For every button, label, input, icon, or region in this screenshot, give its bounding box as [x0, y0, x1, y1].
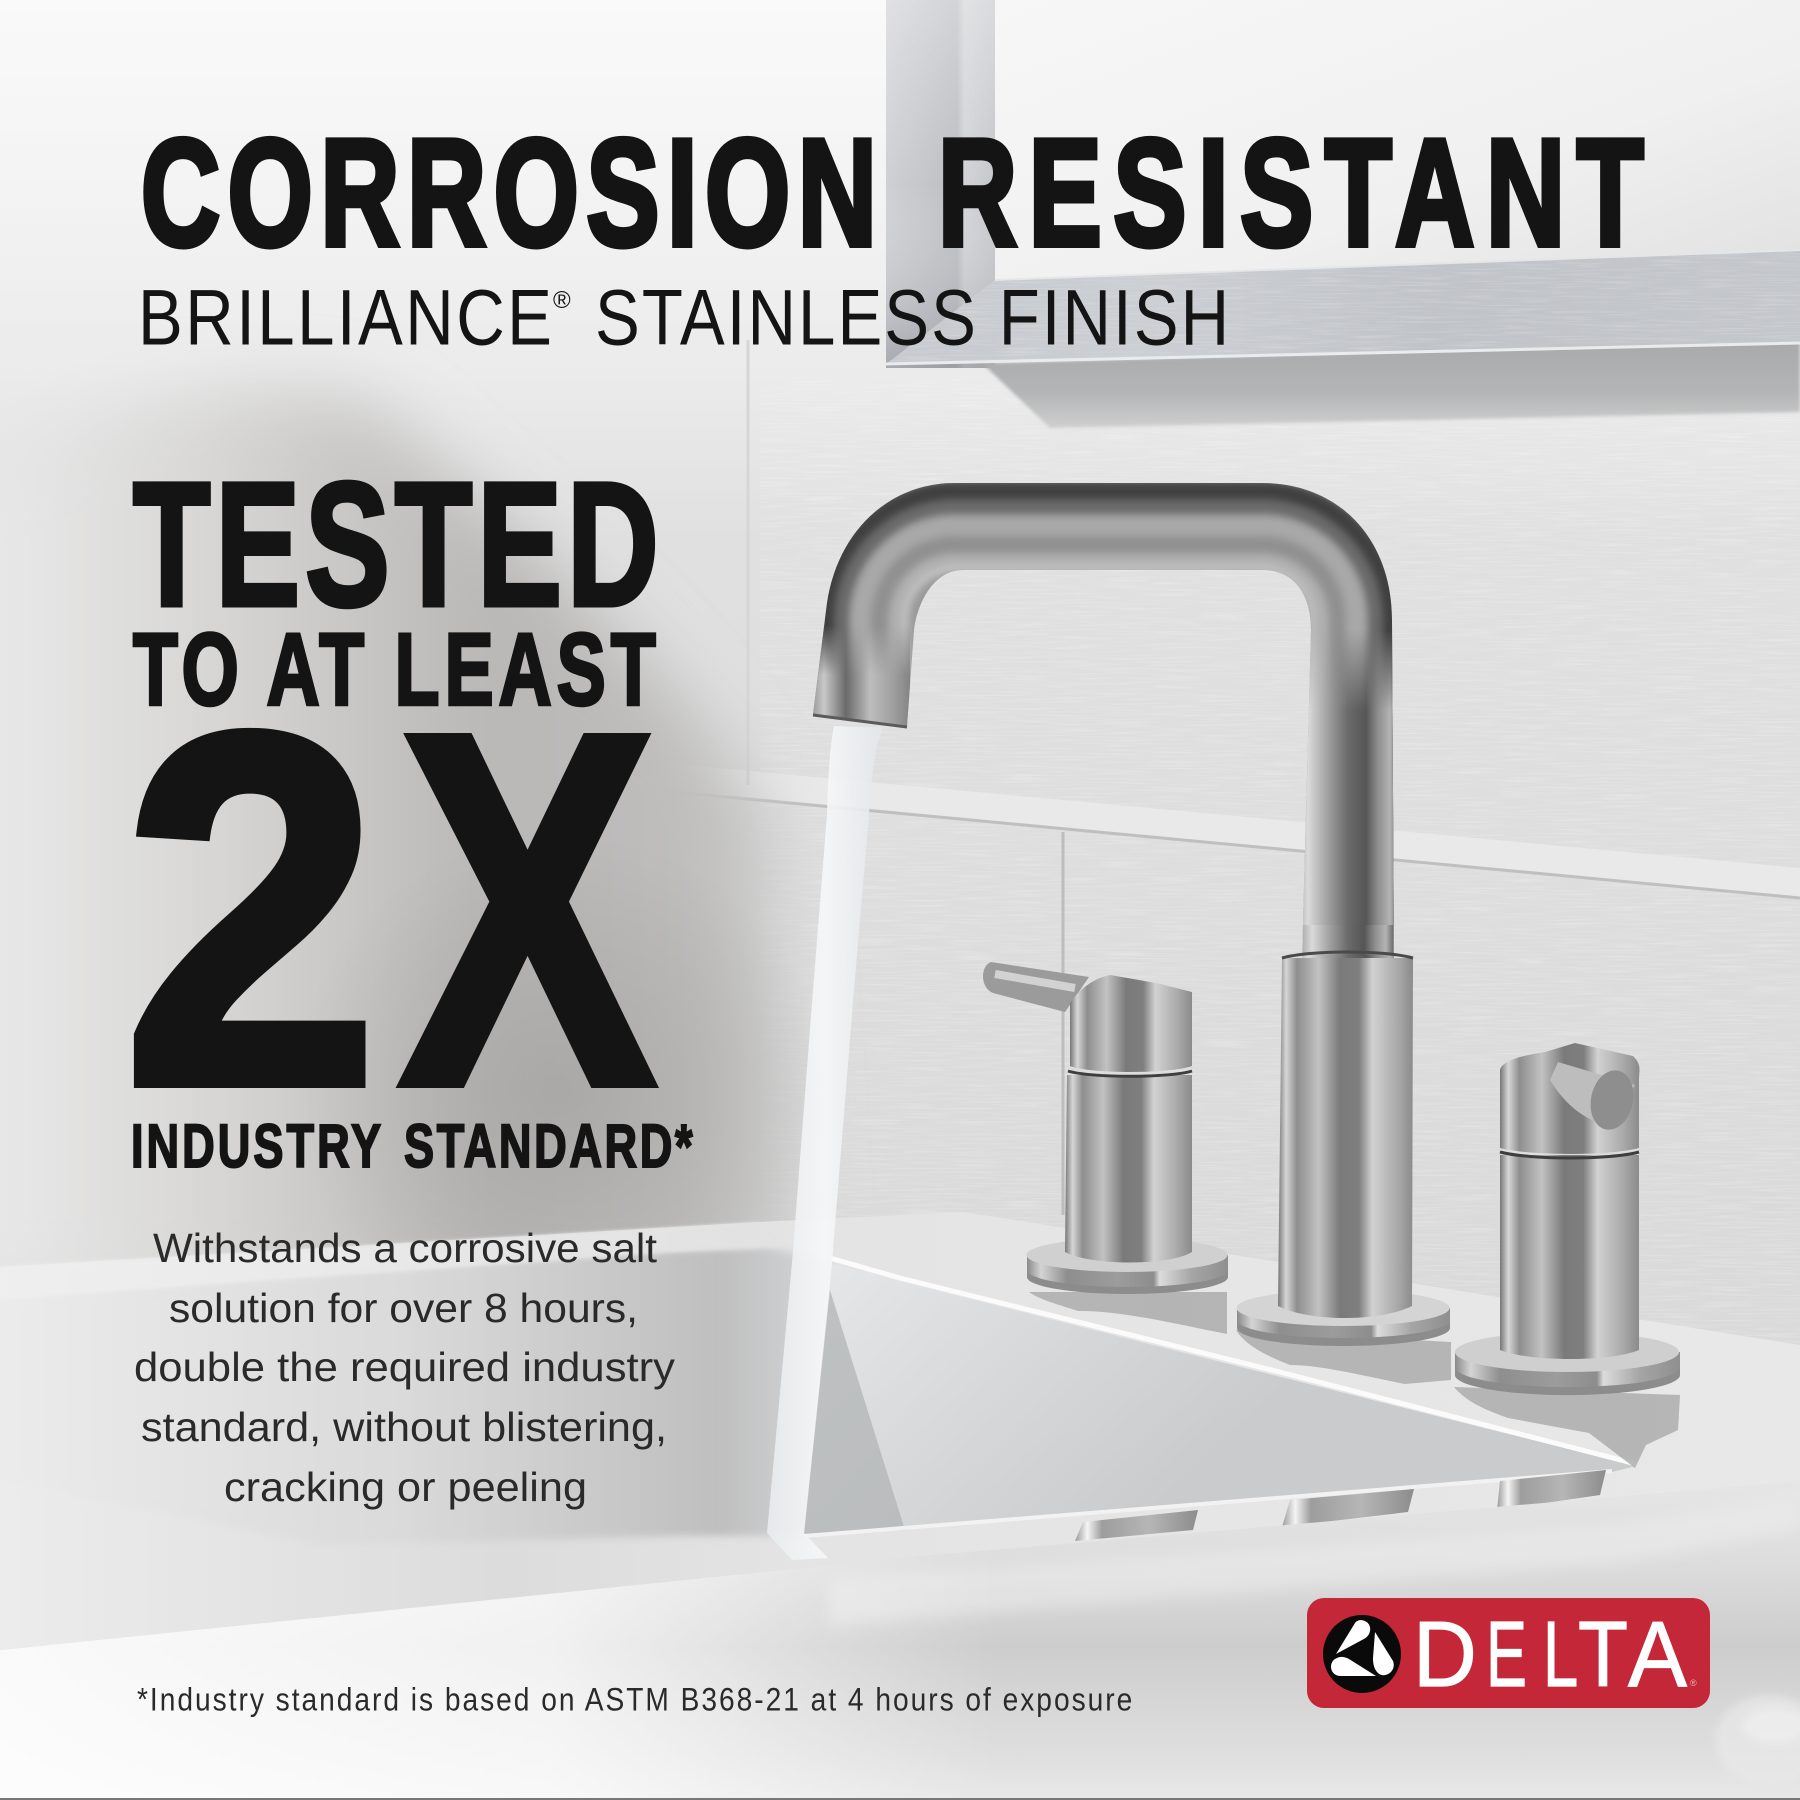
headline: tested to at least 2X industry standard [123, 447, 693, 1189]
faucet reflections on counter [1029, 1292, 1680, 1468]
faucet: left handle [983, 962, 1228, 1294]
sink: chrome reflections on the rim [1075, 1470, 1606, 1541]
water stream [767, 726, 883, 1560]
headline: tested to at least 2X industry standard: X [400, 631, 657, 1189]
soft grey shadow behind the text column [0, 391, 830, 1350]
sink: basin [804, 1258, 1636, 1536]
wordmark [1413, 1602, 1687, 1707]
body text: cracking or peeling [224, 1464, 587, 1510]
subtitle: ® [553, 287, 571, 314]
sink: counter surface [0, 1212, 1800, 1650]
subtitle: STAINLESS FINISH [595, 273, 1229, 362]
Delta logo [1307, 1598, 1710, 1708]
title: RESISTANT [938, 108, 1644, 278]
body text: solution for over 8 hours, [169, 1285, 638, 1331]
water glass, bottom right [1715, 1695, 1800, 1785]
Delta logo: ® [1690, 1678, 1697, 1688]
body text: double the required industry [134, 1344, 676, 1390]
top white haze [0, 0, 886, 340]
footnote: *Industry standard is based on ASTM B368-21 at 4 hours of exposure [137, 1683, 1132, 1718]
title: CORROSION [141, 108, 877, 278]
title [141, 108, 1644, 278]
wordmark: T [1578, 1602, 1628, 1706]
faucet: spout [800, 470, 1410, 970]
body text [134, 1225, 676, 1510]
tile grout lines [630, 340, 1800, 1215]
subtitle [138, 273, 1229, 362]
body text: Withstands a corrosive salt [153, 1225, 658, 1271]
headline: tested to at least 2X industry standard: TO AT LEAST [133, 613, 656, 726]
icon: delta triangle mark [1323, 1615, 1401, 1693]
mirror and frame [880, 0, 1800, 428]
wordmark: D [1413, 1603, 1477, 1707]
headline: tested to at least 2X industry standard: STANDARD* [404, 1112, 693, 1181]
wordmark: E [1486, 1602, 1527, 1706]
sink: left bowl [0, 1248, 830, 1545]
faucet: right handle [1455, 1043, 1680, 1395]
headline: tested to at least 2X industry standard: TESTED [133, 447, 659, 643]
subtitle: BRILLIANCE [138, 273, 552, 362]
headline: tested to at least 2X industry standard: 2 [123, 630, 379, 1189]
headline: tested to at least 2X industry standard: INDUSTRY [131, 1112, 381, 1181]
sink: rear rim band [0, 1222, 790, 1299]
sink: front face [0, 1481, 1800, 1800]
wordmark: L [1543, 1602, 1578, 1706]
faucet: center body [1236, 925, 1450, 1346]
wordmark: A [1628, 1603, 1687, 1707]
page border [0, 1798, 1800, 1800]
body text: standard, without blistering, [141, 1404, 667, 1450]
